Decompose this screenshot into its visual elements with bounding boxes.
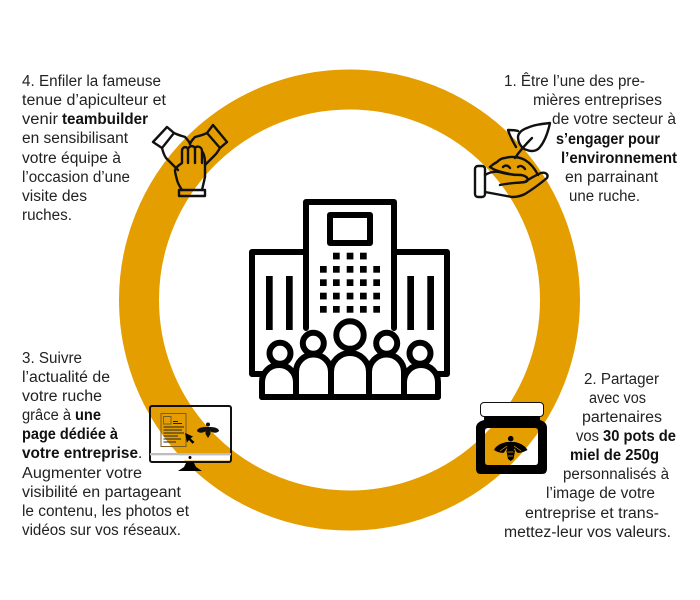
text: step 2: miel de 250g [570,447,659,464]
page document [161,414,186,446]
text: step 4: teambuilder [62,111,148,128]
text: step 4 [22,73,167,224]
text: step 3: . [138,445,142,462]
text: step 3: une [75,407,101,424]
icon: central building with people [252,202,447,397]
text: step 4: en sensibilisant [22,130,129,147]
text: step 3: visibilité en partageant [22,484,182,501]
text: step 2: personnalisés à [563,466,669,483]
text: step 1: 1. Être l’une des pre- [504,73,645,90]
icon: computer monitor with page and bee [150,406,231,471]
text: step 3 [22,350,190,539]
icon: hand holding seedling [475,123,550,197]
text: step 3: votre entreprise [22,445,138,462]
text: step 3: vidéos sur vos réseaux. [22,522,181,539]
text: step 2: 30 pots de [603,428,676,445]
text: step 2: avec vos [589,390,646,407]
text: step 4: venir [22,111,58,128]
text: step 1: mières entreprises [533,92,662,109]
text: step 4: 4. Enfiler la fameuse [22,73,161,90]
text: step 4: ruches. [22,207,72,224]
text: step 4: l’occasion d’une [22,169,130,186]
text: step 1: en parrainant [565,169,659,186]
text: step 1: s’engager pour [556,131,660,148]
text: step 4: visite des [22,188,87,205]
icon: bee on monitor [197,422,219,438]
cursor arrow [185,433,194,444]
text: step 3: Augmenter votre [22,465,142,482]
text: step 3: votre ruche [22,388,102,405]
icon: bee on jar [494,436,528,461]
icon: three joined hands [153,125,227,196]
text: step 3: le contenu, les photos et [22,503,190,520]
text: step 2: partenaires [582,409,662,426]
text: step 3: l’actualité de [22,369,110,386]
text: step 4: tenue d’apiculteur et [22,92,167,109]
text: step 1: de votre secteur à [552,111,676,128]
text: step 2: entreprise et trans- [525,505,659,522]
text: step 2: l’image de votre [546,485,655,502]
text: step 2: 2. Partager [584,371,659,388]
text: step 3: 3. Suivre [22,350,82,367]
icon: honey jar with bee [476,402,547,474]
text: step 2: mettez-leur vos valeurs. [504,524,671,541]
text: step 3: grâce à [22,407,71,424]
text: step 4: votre équipe à [22,150,121,167]
text: step 3: page dédiée à [22,426,118,443]
orange ring [139,90,560,510]
text: step 1: l’environnement [561,150,677,167]
text: step 1: une ruche. [569,188,640,205]
text: step 1 [504,73,677,205]
text: step 2: vos [576,428,599,445]
text: step 2 [504,371,676,541]
